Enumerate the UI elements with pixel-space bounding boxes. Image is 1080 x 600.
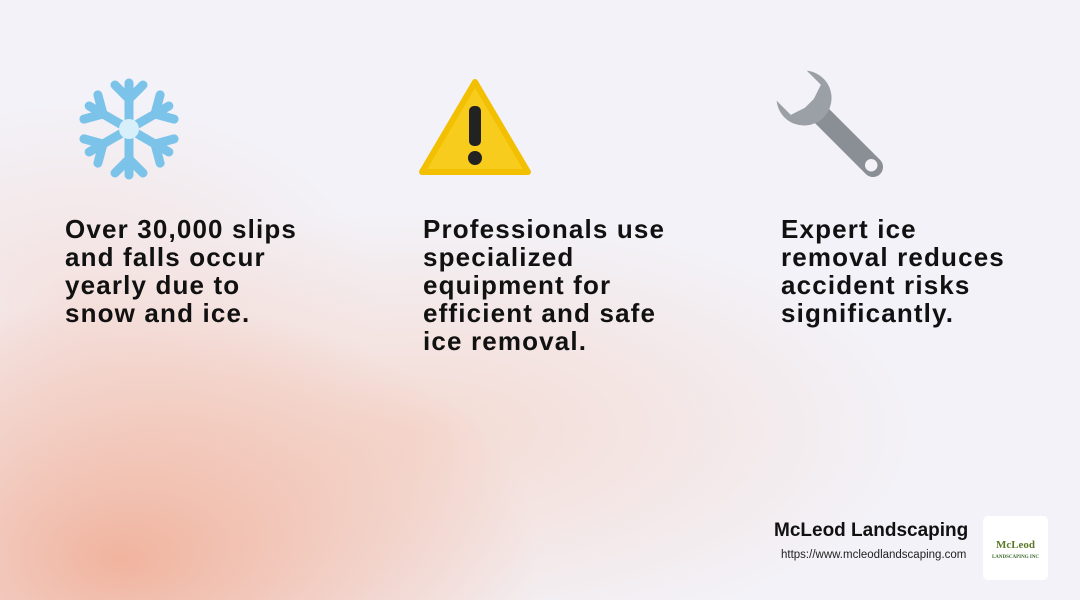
- text: professionals: Professionals use: [423, 214, 665, 244]
- icon: snowflake: [79, 78, 179, 180]
- text: slips and falls: snow and ice.: [65, 298, 250, 328]
- logo: [983, 516, 1048, 580]
- text: slips and falls: and falls occur: [65, 242, 266, 272]
- text: slips and falls: [65, 214, 297, 328]
- text: expert removal: accident risks: [781, 270, 971, 300]
- text: professionals: efficient and safe: [423, 298, 656, 328]
- text: professionals: equipment for: [423, 270, 611, 300]
- text: slips and falls: Over 30,000 slips: [65, 214, 297, 244]
- text: slips and falls: yearly due to: [65, 270, 240, 300]
- text: expert removal: significantly.: [781, 298, 954, 328]
- logo: McLeod: [996, 539, 1035, 551]
- brand name: McLeod Landscaping: [774, 520, 968, 541]
- text: expert removal: [781, 214, 1005, 328]
- icon: warning: [419, 79, 531, 175]
- text: expert removal: Expert ice: [781, 214, 917, 244]
- text: professionals: specialized: [423, 242, 574, 272]
- logo: LANDSCAPING INC: [992, 555, 1039, 560]
- url: https://www.mcleodlandscaping.com: [781, 549, 966, 561]
- icon: wrench: [776, 70, 883, 177]
- text: professionals: ice removal.: [423, 326, 587, 356]
- text: professionals: [423, 214, 665, 356]
- text: expert removal: removal reduces: [781, 242, 1005, 272]
